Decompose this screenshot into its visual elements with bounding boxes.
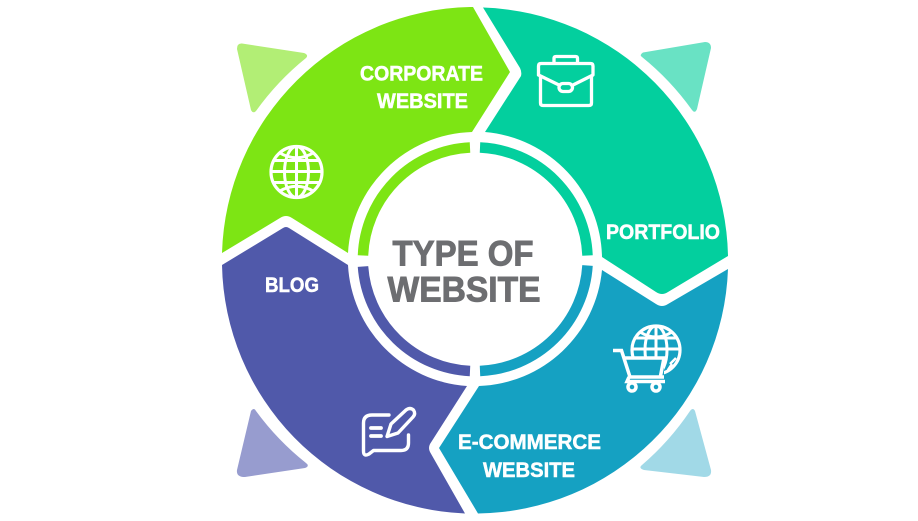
label: corporate website: WEBSITE [377,90,468,113]
label: e-commerce website: WEBSITE [483,459,575,482]
center title: TYPE OF [392,234,534,274]
icon: briefcase [538,56,593,106]
decorative triangle: lavender [237,409,308,477]
label: e-commerce website: E-COMMERCE [458,431,601,454]
segment: portfolio [483,8,728,294]
segment: blog [222,227,467,514]
decorative triangle: light blue [640,409,711,477]
label: portfolio: PORTFOLIO [606,221,720,244]
inner ring: green [363,148,470,256]
label: corporate website: CORPORATE [360,62,483,86]
inner ring: purple [363,266,470,371]
inner ring: blue [480,266,588,371]
segment: corporate website [222,7,510,253]
label: blog: BLOG [265,274,319,297]
icon: shopping cart with globe [613,326,680,391]
icon: globe [271,146,322,198]
decorative triangle: teal [641,42,711,112]
label: corporate website [360,62,483,113]
center title [388,234,540,310]
label: e-commerce website [458,431,601,482]
center title: WEBSITE [388,270,540,310]
inner ring: teal [480,148,588,256]
segment: e-commerce website [439,269,728,514]
icon: pen and note [364,408,415,455]
decorative triangle: green [237,43,307,112]
